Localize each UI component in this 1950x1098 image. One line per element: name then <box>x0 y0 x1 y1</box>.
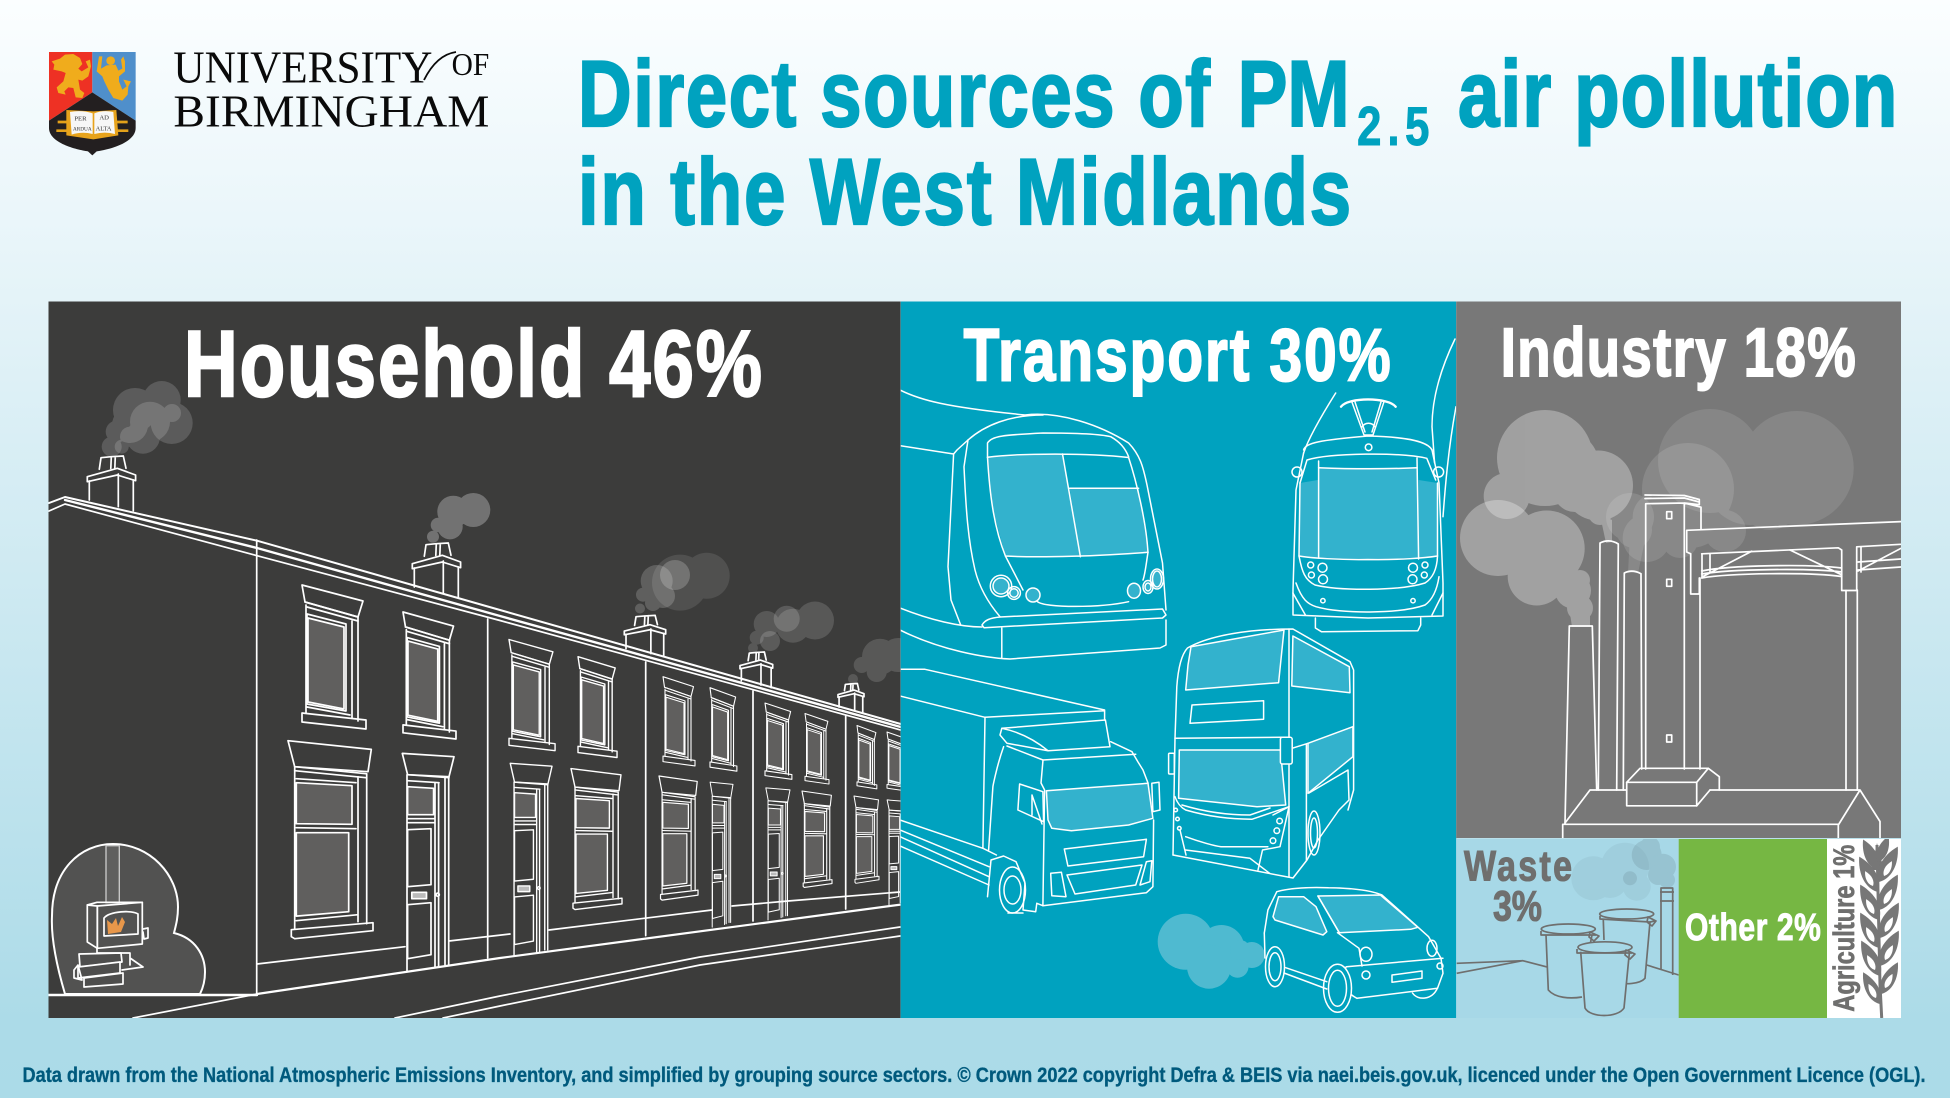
inset: wood-burning stove <box>52 844 205 994</box>
illustration: terraced houses <box>48 381 915 1018</box>
icon: wheat <box>1859 839 1899 1018</box>
icon: university shield: ARDUA <box>73 127 92 133</box>
logo wordmark: BIRMINGHAM <box>173 86 489 137</box>
heading: industry: Industry 18% <box>1501 315 1856 392</box>
icon: tram <box>1292 339 1456 632</box>
doors <box>402 753 908 972</box>
heading: waste: 3% <box>1493 883 1542 931</box>
factory buildings <box>1563 495 1901 838</box>
waste chimney and ground <box>1457 888 1679 975</box>
logo wordmark: UNIVERSITY <box>173 42 432 93</box>
title: in the West Midlands <box>578 139 1351 244</box>
heading: other: Other 2% <box>1685 907 1821 949</box>
icon: train <box>900 390 1166 659</box>
icon: double-decker bus <box>1169 629 1354 878</box>
factory smoke <box>1460 409 1854 627</box>
roof and ground lines <box>48 497 901 1018</box>
panel: industry 18% <box>1456 302 1901 838</box>
icon: university shield: AD <box>99 114 109 121</box>
upper windows <box>302 585 907 791</box>
panel: other 2% <box>1679 839 1827 1018</box>
icon: car with exhaust <box>1158 887 1443 1012</box>
heading: agriculture: Agriculture 1% <box>1828 845 1861 1012</box>
panel: household 46% <box>48 302 915 1018</box>
waste smoke <box>1571 837 1676 901</box>
logo wordmark: OF <box>452 46 489 82</box>
title: Direct sources of <box>578 41 1211 146</box>
heading: waste <box>1464 843 1572 931</box>
title <box>578 41 1897 244</box>
chimneys <box>87 456 864 713</box>
icon: university shield: PER <box>74 116 87 123</box>
panel: waste 3% <box>1456 837 1679 1018</box>
panel: transport 30% <box>900 302 1456 1018</box>
lower windows <box>288 741 879 939</box>
heading: waste: Waste <box>1464 843 1572 891</box>
icon: university shield: ALTA <box>96 125 112 132</box>
title: PM <box>1238 41 1350 146</box>
panel: agriculture 1% <box>1827 834 1905 1018</box>
icon: university shield <box>49 52 136 155</box>
heading: transport: Transport 30% <box>964 315 1391 397</box>
logo wordmark <box>173 42 489 137</box>
title: 2.5 <box>1357 95 1429 157</box>
title: air pollution <box>1458 41 1897 146</box>
icon: waste bins <box>1541 909 1656 1016</box>
chimney smoke <box>102 381 915 684</box>
heading: household: Household 46% <box>184 311 762 416</box>
icon: truck <box>900 669 1160 913</box>
logo: University of Birmingham <box>49 42 489 155</box>
